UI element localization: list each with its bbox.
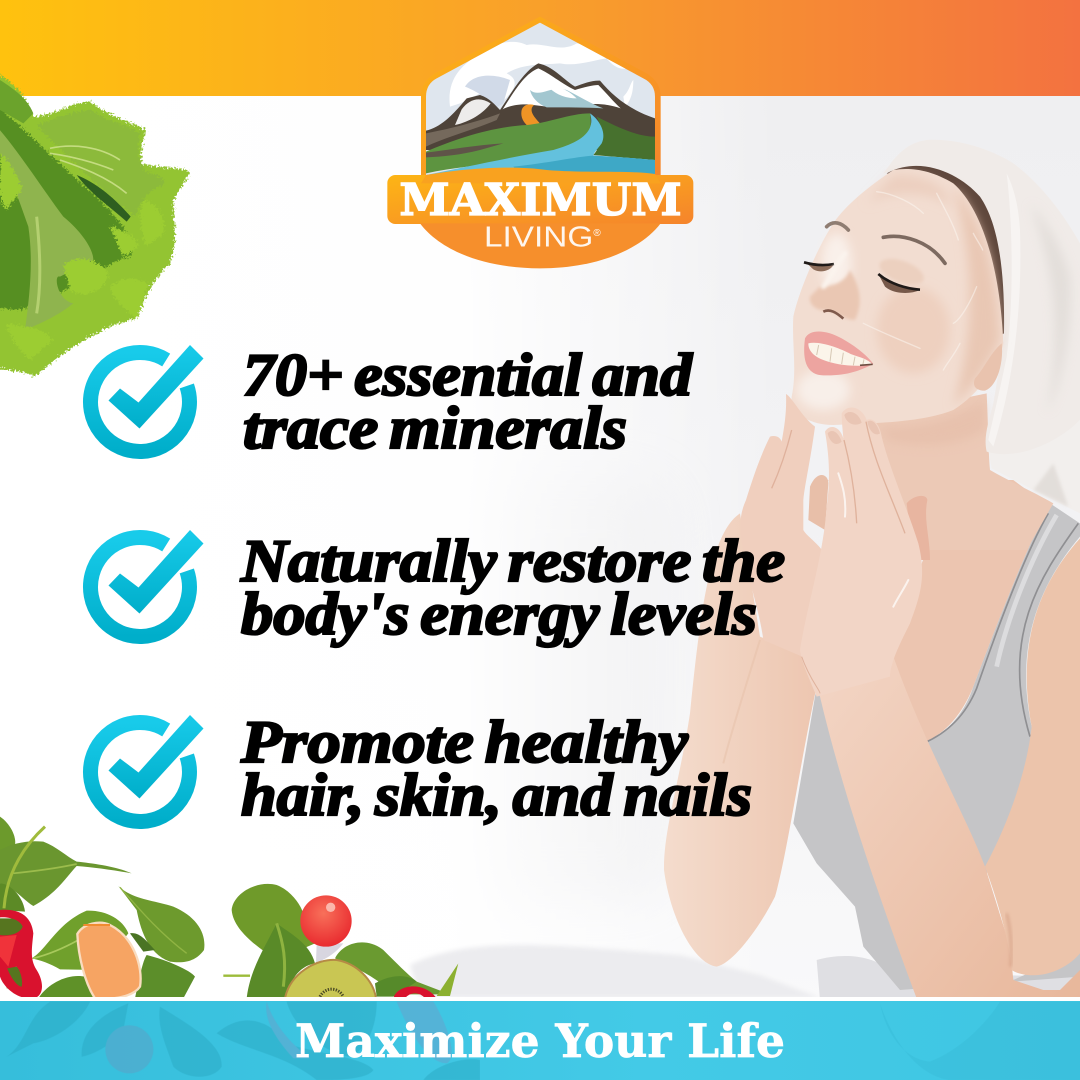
nostril [823,311,843,319]
benefit 2 [90,528,785,647]
tomato shadow [316,943,343,963]
face [792,169,1003,425]
lettuce [0,72,190,377]
neck [873,393,1053,550]
kiwi [285,960,376,998]
benefit 3 [90,709,752,828]
bottom dome [420,223,661,268]
teeth [808,343,872,366]
sub brand: LIVING [484,222,593,254]
eyebrows [827,223,848,230]
heading [240,709,752,828]
pinky between hands [808,475,828,530]
right arm [813,647,1080,998]
left arm shadow edge [723,640,760,763]
cream on hand [838,473,908,607]
snow caps [503,68,621,109]
brand name: MAXIMUM [399,175,682,226]
hands traced at 3x, one tone so fingers flow into palms [740,394,930,697]
head and neck traced at 3x [792,140,1080,550]
small pepper [394,986,436,997]
logo landscape [423,20,657,177]
orange keyhole [521,104,542,125]
nose [810,270,860,320]
white divider line [0,997,1080,1002]
neck shadow [880,400,985,445]
towel fold shading [988,173,1020,447]
right hand with fingers [800,408,922,697]
towel [883,140,1080,454]
icon: check circle [90,715,204,821]
face shading [953,187,1000,407]
top orange band [0,0,1080,96]
footer band [0,1001,1080,1080]
left hand with fingers [740,394,825,660]
icon: check circle [90,530,204,636]
lettuce dark pockets [0,107,132,310]
spinach leaves [0,817,458,998]
tank strap binding [923,513,1078,743]
tomato [300,895,352,947]
body traced at 3x [664,480,1080,1000]
logo [387,17,693,268]
clouds [449,42,628,107]
upper arm [985,538,1080,975]
hair soft edge [980,230,998,333]
right hand finger lines [844,422,905,533]
ghosted produce reflection [7,1002,1080,1080]
elbow crease [1007,913,1011,967]
orange segment [77,923,141,999]
heading: 70+ essential and [243,342,693,408]
heading: Naturally restore the [240,528,785,594]
heading: hair, skin, and nails [241,762,752,828]
cheek tone [877,287,950,373]
shield outline [421,17,661,183]
lower towel [988,420,1080,513]
footer text: Maximize Your Life [295,1014,785,1068]
green hills [426,113,591,173]
left hand finger line [772,430,792,488]
sheet [410,945,820,998]
big rib [0,128,93,330]
registered mark: ® [593,228,601,239]
ear [974,343,1002,391]
dark slit [77,175,131,222]
heading [240,528,785,647]
heading [243,342,693,461]
red pepper [0,918,23,988]
nails [828,412,880,444]
grey tank top [793,503,1080,990]
left arm [664,513,817,967]
heading: Promote healthy [240,709,688,775]
lettuce frilly body [0,72,190,377]
bright frill highlights [0,153,164,360]
eyelid shading [876,254,927,290]
icon: check circle [90,345,204,451]
photo: woman applying face mask [410,140,1080,1000]
lower ridge grey [426,113,500,147]
benefit 1 [90,342,693,461]
river [426,113,655,175]
cream highlights [797,370,850,410]
heading: body's energy levels [241,581,757,647]
food cluster: bottom left [0,817,458,999]
eyes [805,262,834,271]
leaf ribs [50,146,127,193]
thumb behind right hand [907,496,930,560]
back mountain [426,63,655,150]
hair [887,166,1004,343]
heading: trace minerals [243,395,627,461]
banner [387,175,693,224]
lips [804,331,873,375]
trousers [817,956,1080,1000]
wrist crease [802,657,820,693]
neck and chest [827,480,1050,743]
leaf top corner [0,80,33,123]
upper leaf [37,110,164,217]
